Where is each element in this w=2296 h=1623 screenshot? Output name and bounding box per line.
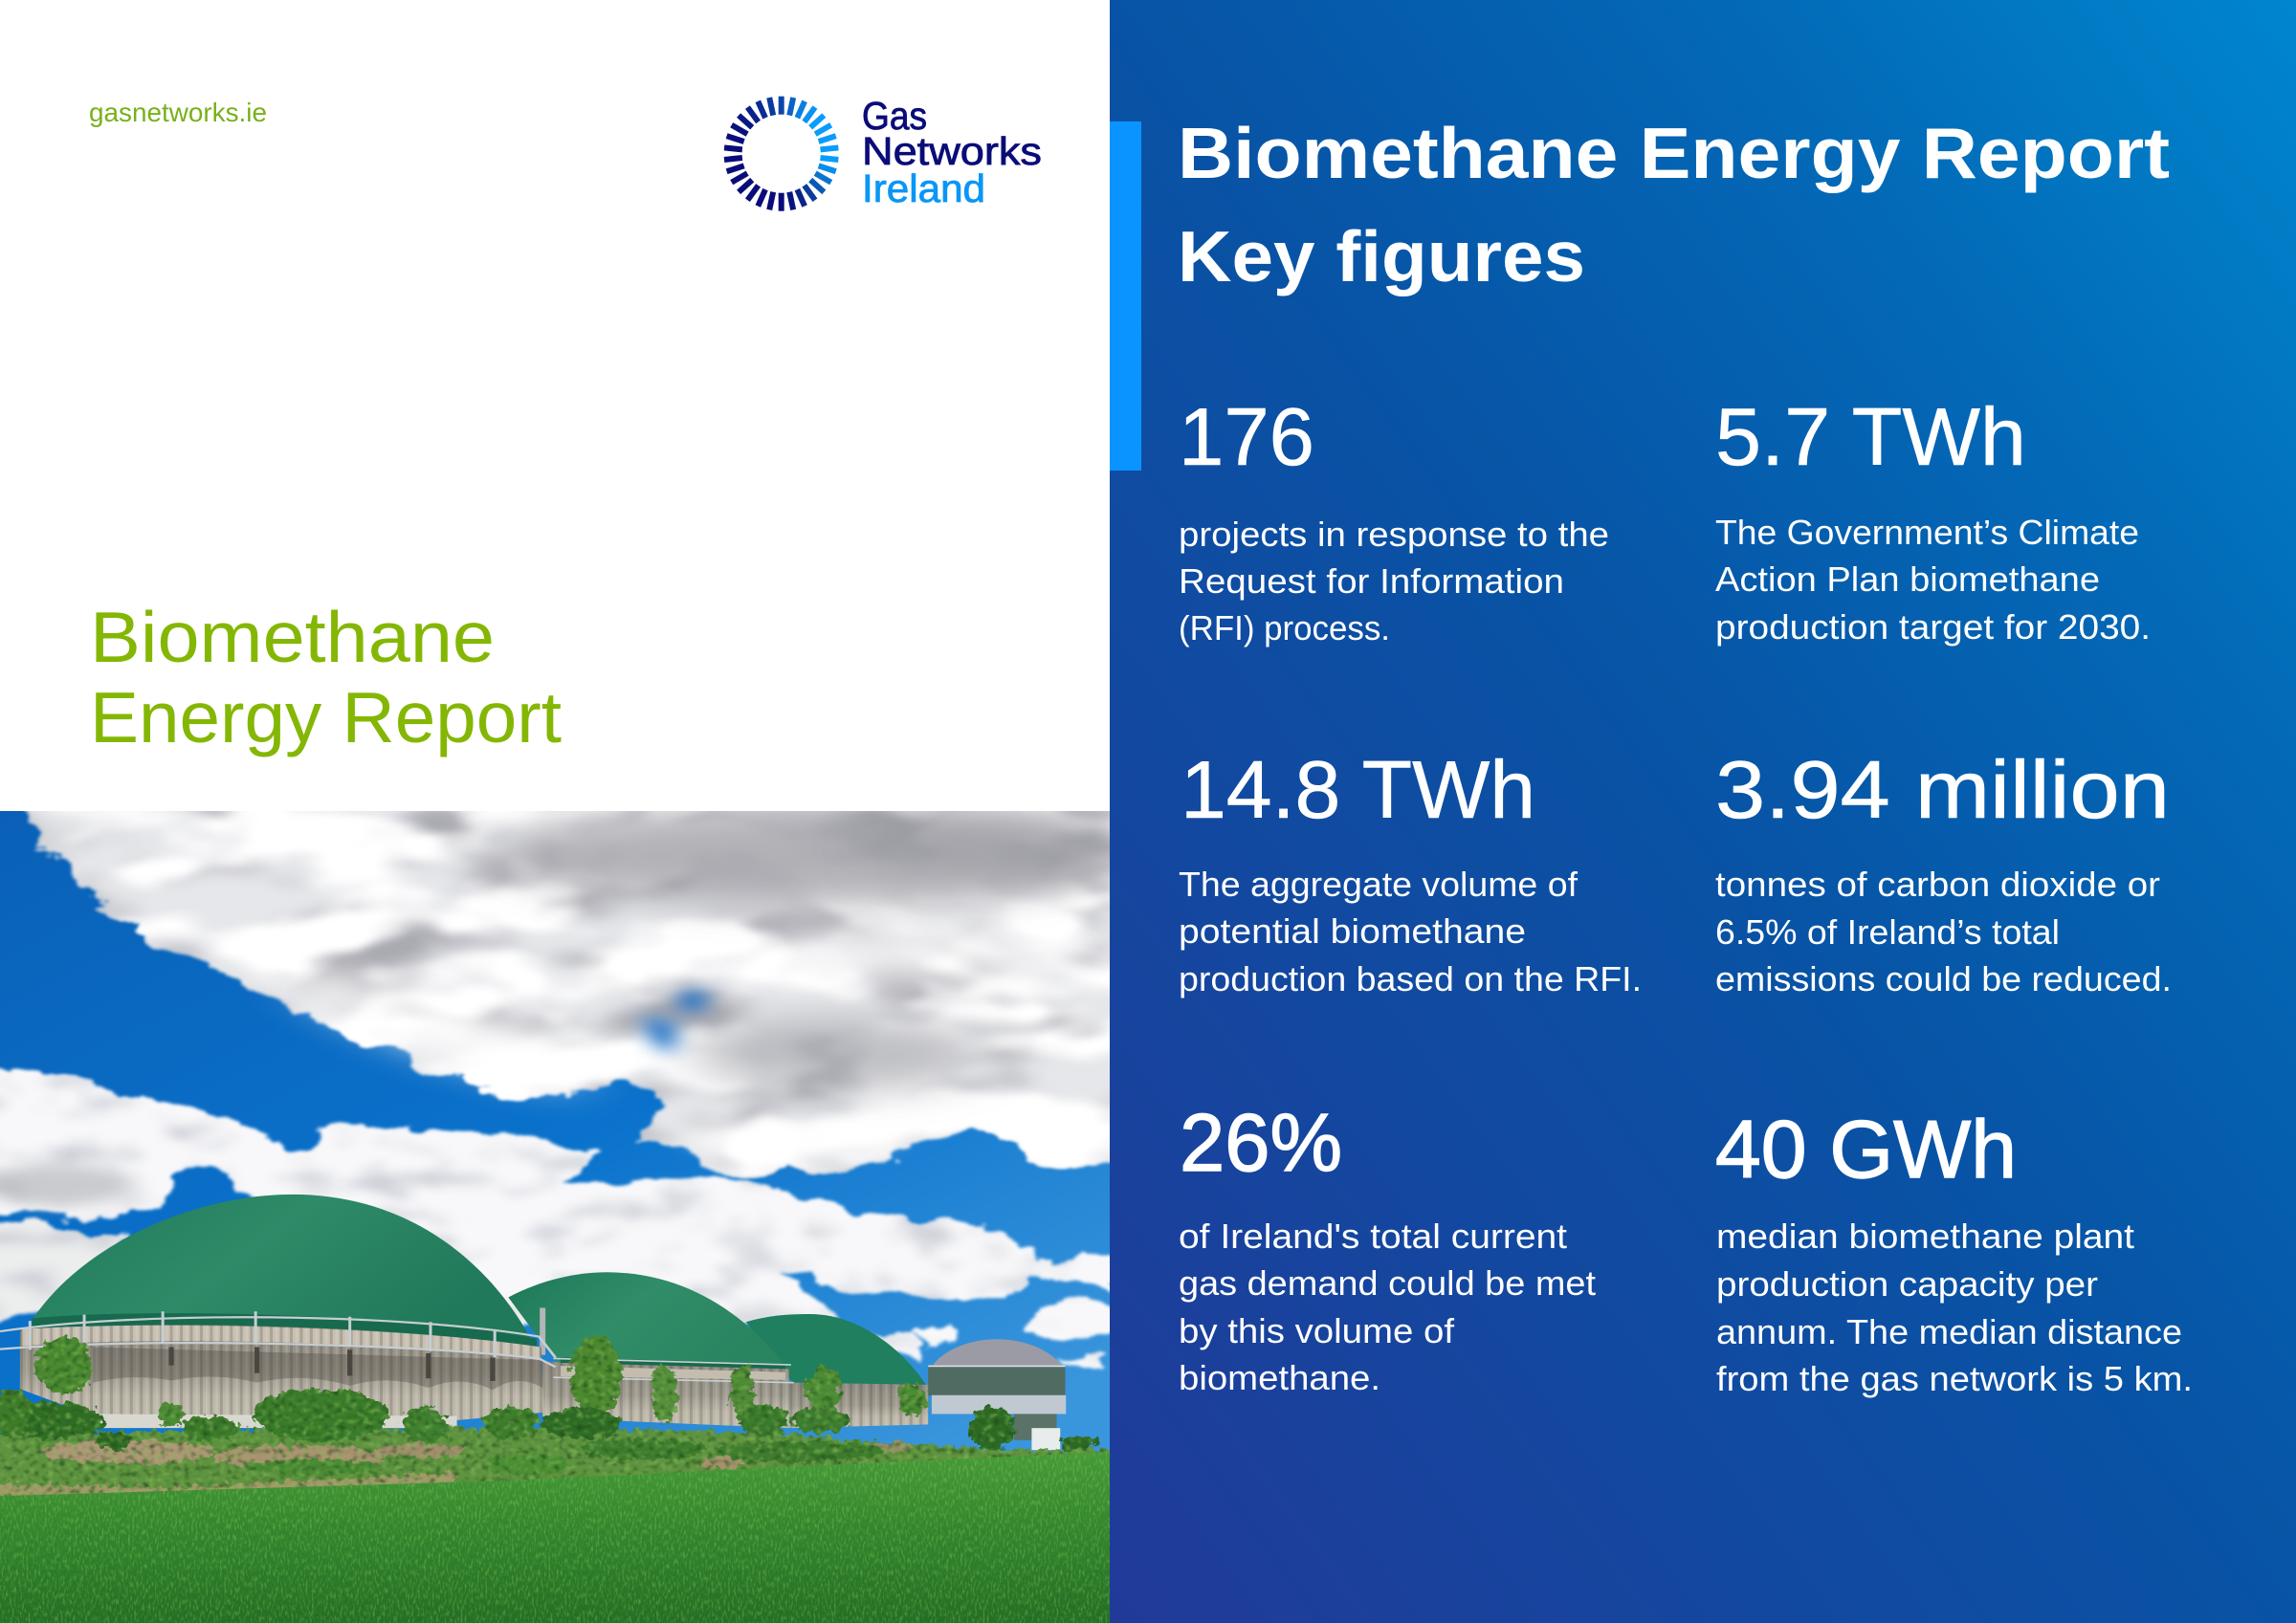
panel heading: Biomethane Energy Report [1178, 113, 2170, 193]
figure: 26%: of Ireland's total current [1179, 1217, 1567, 1256]
logo: Gas Networks Ireland [724, 94, 1042, 211]
logo wordmark: Ireland [862, 166, 985, 210]
figure: 14.8 TWh: production based on the RFI. [1179, 959, 1642, 998]
figure: 14.8 TWh [1179, 745, 1642, 998]
meadow bank [0, 1425, 1110, 1496]
second dome [508, 1272, 794, 1428]
panel: key figures [1110, 0, 2296, 1623]
figure: 5.7 TWh: Action Plan biomethane [1715, 559, 2100, 599]
lower cloud bank [0, 1060, 1171, 1363]
logo wordmark: Gas [862, 94, 927, 138]
figure: 3.94 million: 3.94 million [1715, 745, 2170, 836]
shrubs and trees [0, 1337, 1096, 1476]
photo: biogas digester domes under a cloudy sky [0, 772, 1171, 1623]
figure: 26%: gas demand could be met [1179, 1263, 1596, 1303]
cover heading [90, 597, 562, 757]
panel: white cover area [0, 0, 1110, 811]
panel heading [1178, 113, 2170, 296]
figure: 26%: 26% [1180, 1098, 1342, 1189]
figure: 3.94 million [1715, 745, 2172, 998]
small far tank [928, 1339, 1066, 1450]
figure: 176 projects: 176 [1179, 392, 1314, 483]
figure: 5.7 TWh: production target for 2030. [1715, 607, 2151, 647]
figure: 176 projects: projects in response to the [1179, 515, 1609, 554]
icon: segmented ring [724, 97, 838, 211]
panel heading: Key figures [1178, 216, 1585, 296]
logo wordmark [862, 94, 1042, 210]
figure: 14.8 TWh: 14.8 TWh [1181, 745, 1535, 836]
figure: 176 projects [1179, 392, 1609, 647]
figure: 14.8 TWh: The aggregate volume of [1179, 865, 1578, 904]
figure: 40 GWh: annum. The median distance [1716, 1312, 2182, 1351]
figure: 3.94 million: 6.5% of Ireland’s total [1715, 912, 2060, 952]
figure: 40 GWh: median biomethane plant [1716, 1217, 2134, 1256]
figure: 5.7 TWh: The Government’s Climate [1715, 513, 2139, 552]
figure: 176 projects: Request for Information [1179, 561, 1564, 601]
figure: 14.8 TWh: potential biomethane [1179, 911, 1526, 951]
figure: 5.7 TWh [1715, 392, 2151, 647]
logo wordmark: Networks [862, 129, 1042, 173]
main dome [20, 1195, 544, 1428]
figure: 40 GWh: from the gas network is 5 km. [1716, 1359, 2193, 1398]
website link: gasnetworks.ie [89, 98, 267, 127]
figure: 26%: by this volume of [1179, 1311, 1455, 1350]
upper cloud bank [21, 811, 1110, 1180]
figure: 40 GWh [1715, 1105, 2193, 1398]
figure: 40 GWh: production capacity per [1716, 1264, 2098, 1304]
figure: 3.94 million: tonnes of carbon dioxide or [1715, 865, 2160, 904]
figure: 5.7 TWh: 5.7 TWh [1715, 392, 2026, 483]
figure: 26% [1179, 1098, 1596, 1397]
sky [0, 803, 1114, 1483]
figure: 176 projects: (RFI) process. [1179, 608, 1390, 647]
grass field [0, 1452, 1114, 1623]
figure: 26%: biomethane. [1179, 1358, 1380, 1397]
figure: 40 GWh: 40 GWh [1715, 1105, 2017, 1195]
cover heading: Energy Report [90, 677, 562, 757]
cover heading: Biomethane [90, 597, 495, 677]
accent bar [1110, 121, 1141, 471]
third dome [746, 1314, 928, 1428]
railing [0, 1311, 556, 1367]
figure: 3.94 million: emissions could be reduced. [1715, 959, 2172, 998]
